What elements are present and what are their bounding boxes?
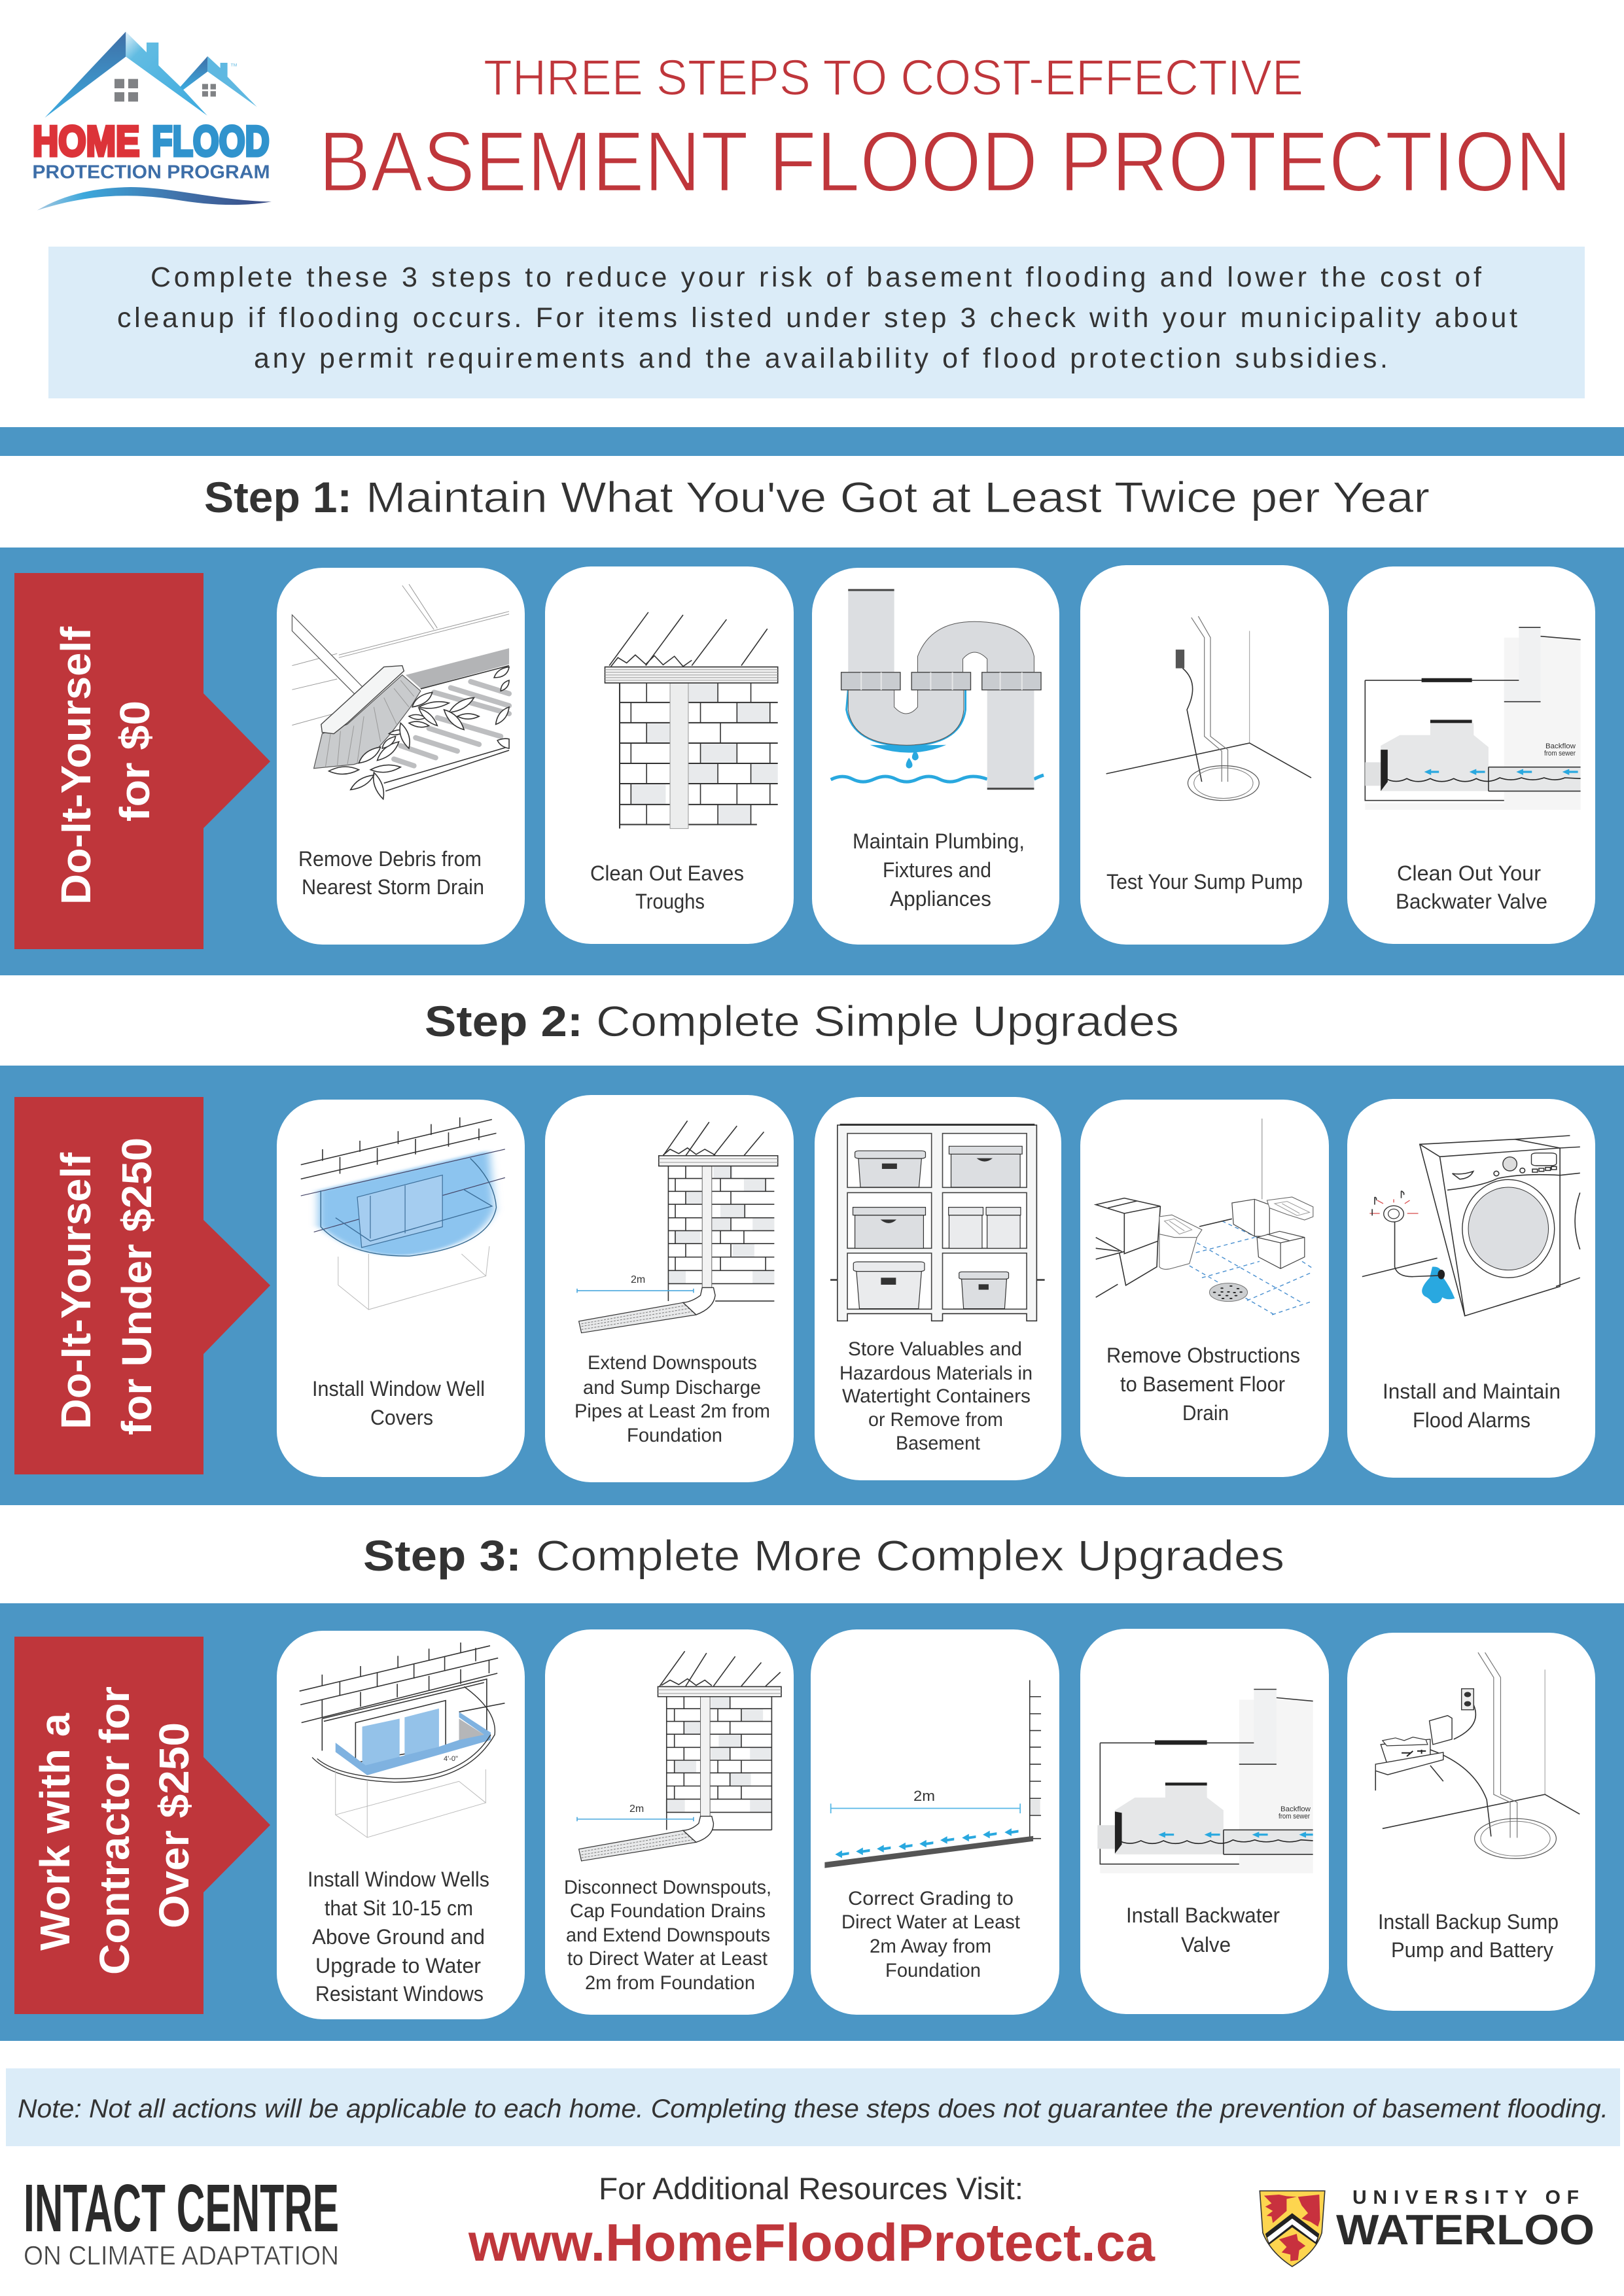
card: remove debris — [277, 568, 525, 945]
red tag: do-it-yourself for $0: Do-It-Yourself — [52, 626, 99, 905]
card: backup sump pump and battery — [1347, 1633, 1595, 2011]
card label — [1126, 1904, 1280, 1957]
icon: window well with water resistant window — [300, 1643, 504, 1837]
card: maintain plumbing — [812, 568, 1059, 945]
card: install backwater valve — [1080, 1629, 1329, 2014]
card: window well covers — [277, 1100, 525, 1477]
card label: Install Window Well — [312, 1377, 485, 1400]
red tag: work with a contractor for over $250: Contractor for — [91, 1686, 138, 1975]
red tag: work with a contractor for over $250: Work with a — [31, 1713, 79, 1951]
card label: Appliances — [890, 887, 991, 911]
dimension label: 2m: 2m — [631, 1274, 645, 1285]
card label: that Sit 10-15 cm — [325, 1896, 473, 1920]
card label: Store Valuables and — [848, 1338, 1022, 1360]
heading: step 3: Step 3: — [363, 1531, 521, 1580]
introduction text: any permit requirements and the availability of flood protection subsidies. — [254, 343, 1388, 374]
icon: backup sump pump and battery — [1375, 1652, 1580, 1858]
card label: to Basement Floor — [1120, 1372, 1285, 1396]
resources call to action: www.HomeFloodProtect.ca — [468, 2214, 1156, 2272]
card label — [1383, 1380, 1561, 1432]
icon: window well cover — [301, 1117, 505, 1310]
icon: washer with flood alarm — [1362, 1136, 1580, 1316]
card label — [574, 1352, 770, 1446]
card label: Above Ground and — [312, 1925, 485, 1949]
card label — [853, 829, 1025, 911]
card label: Nearest Storm Drain — [302, 875, 484, 899]
tiny label: backflow — [1544, 742, 1576, 757]
card label — [839, 1338, 1033, 1454]
heading: step 1: Maintain What You've Got at Least Twice per Year — [366, 473, 1430, 521]
card: correct grading — [811, 1629, 1059, 2015]
tiny label: backflow: Backflow — [1545, 742, 1576, 750]
card label: Clean Out Your — [1397, 861, 1541, 885]
card: install window wells — [277, 1631, 525, 2019]
logo: Intact Centre: INTACT CENTRE — [24, 2170, 339, 2246]
top blue band — [0, 427, 1624, 456]
card label — [298, 847, 484, 899]
tiny label: backflow — [1279, 1805, 1311, 1820]
card label: Backwater Valve — [1396, 890, 1547, 913]
card label: 2m from Foundation — [585, 1972, 755, 1994]
card label: Install Backup Sump — [1378, 1910, 1559, 1934]
card label: Clean Out Eaves — [590, 861, 744, 885]
tiny label: backflow: from sewer — [1279, 1813, 1310, 1820]
panel: step 3 — [0, 1603, 1624, 2041]
card label: or Remove from — [868, 1409, 1003, 1431]
card label: Valve — [1181, 1933, 1231, 1957]
heading: step 2: Complete Simple Upgrades — [596, 997, 1179, 1045]
resources call to action — [468, 2171, 1156, 2272]
card label: Fixtures and — [883, 858, 991, 882]
red tag: do-it-yourself for under $250 — [14, 1097, 270, 1474]
card label: Correct Grading to — [848, 1888, 1014, 1909]
introduction text — [117, 262, 1517, 374]
card label: Install Backwater — [1126, 1904, 1280, 1927]
red tag: work with a contractor for over $250: Over $250 — [150, 1722, 198, 1928]
resources call to action: For Additional Resources Visit: — [599, 2171, 1023, 2206]
university of: UNIVERSITY OF — [1352, 2187, 1579, 2208]
logo: Home Flood Protection Program — [32, 31, 272, 211]
title line 1: THREE STEPS TO COST-EFFECTIVE — [484, 50, 1303, 106]
heading: step 2: Step 2: — [425, 997, 583, 1045]
card label: Install Window Wells — [308, 1868, 489, 1891]
card label: Disconnect Downspouts, — [564, 1877, 771, 1898]
dimension label: 2m: 2m — [629, 1803, 644, 1815]
tiny label: backflow: Backflow — [1280, 1805, 1311, 1813]
card label: Install and Maintain — [1383, 1380, 1561, 1403]
panel: note — [6, 2068, 1620, 2146]
icon: small house roof — [180, 56, 257, 107]
icon: Waterloo shield — [1260, 2191, 1325, 2267]
icon: disconnected downspout — [577, 1651, 781, 1861]
card label: Foundation — [885, 1960, 981, 1981]
trademark: TM — [231, 63, 237, 68]
card label: Remove Debris from — [298, 847, 482, 871]
panel: step 2 — [0, 1066, 1624, 1505]
logo word: FLOOD: FLOOD — [152, 117, 270, 165]
logo: University of Waterloo — [1260, 2187, 1595, 2267]
note text: Note: Not all actions will be applicable to each home. Completing these steps does not guarantee the prevention of basement flooding. — [18, 2095, 1608, 2123]
card: clean eaves troughs — [545, 566, 794, 944]
card label: Covers — [370, 1406, 433, 1429]
heading: step 3: Complete More Complex Upgrades — [536, 1531, 1284, 1580]
card label: Pump and Battery — [1391, 1938, 1553, 1962]
card label — [1106, 1344, 1300, 1425]
card label — [1396, 861, 1547, 913]
red tag: do-it-yourself for under $250: for Under $250 — [113, 1138, 160, 1435]
card label: and Extend Downspouts — [566, 1924, 770, 1946]
icon: boxes around floor drain — [1096, 1119, 1313, 1315]
waterloo: WATERLOO — [1336, 2206, 1595, 2253]
icon: sump pump — [1106, 616, 1311, 801]
card label: to Direct Water at Least — [567, 1948, 768, 1970]
card: flood alarms — [1347, 1099, 1595, 1478]
card label: Test Your Sump Pump — [1106, 870, 1303, 894]
card label — [308, 1868, 489, 2006]
icon: broom sweeping leaves off a storm drain — [292, 584, 509, 799]
card label: Upgrade to Water — [315, 1954, 481, 1977]
card label: Basement — [896, 1433, 981, 1454]
logo: Intact Centre: ON CLIMATE ADAPTATION — [24, 2240, 339, 2270]
icon: gutter and brick wall — [605, 612, 778, 829]
card label: Remove Obstructions — [1106, 1344, 1300, 1367]
card label: Pipes at Least 2m from — [574, 1400, 770, 1422]
icon: backwater valve — [1097, 1690, 1313, 1873]
card: disconnect downspouts — [545, 1629, 794, 2015]
card label — [590, 861, 744, 913]
icon: sloped grade away from foundation — [824, 1680, 1041, 1868]
icon: leaking P-trap pipe — [831, 589, 1044, 790]
red tag: work with a contractor for over $250 — [14, 1637, 270, 2014]
card label — [564, 1877, 771, 1994]
card: test sump pump — [1080, 565, 1329, 945]
icon: water swoosh — [37, 187, 272, 211]
dimension label: 2m: 2m — [913, 1788, 935, 1804]
card label: Resistant Windows — [315, 1982, 484, 2006]
red tag: do-it-yourself for $0: for $0 — [111, 701, 158, 822]
card: clean backwater valve — [1347, 566, 1595, 944]
icon: house windows — [115, 79, 216, 101]
card label — [841, 1888, 1021, 1981]
card label — [1378, 1910, 1559, 1962]
card label: Direct Water at Least — [841, 1911, 1021, 1933]
card label: Cap Foundation Drains — [570, 1900, 766, 1922]
card label: and Sump Discharge — [583, 1377, 761, 1399]
panel: step 1 — [0, 548, 1624, 975]
red tag: do-it-yourself for $0 — [14, 573, 270, 949]
icon: downspout extension — [577, 1121, 778, 1333]
tiny label: backflow: from sewer — [1544, 750, 1576, 757]
logo word: HOME: HOME — [33, 117, 139, 165]
card label — [312, 1377, 485, 1429]
card label: Maintain Plumbing, — [853, 829, 1025, 853]
card label: Flood Alarms — [1413, 1408, 1530, 1432]
card label: Troughs — [635, 890, 705, 913]
dimension label: 4'-0" — [444, 1755, 458, 1763]
logo: Intact Centre — [24, 2170, 339, 2270]
card label: Foundation — [627, 1425, 722, 1446]
heading: step 1: Step 1: — [204, 473, 352, 521]
card label: Extend Downspouts — [588, 1352, 757, 1374]
card label: Watertight Containers — [842, 1385, 1031, 1407]
card label: 2m Away from — [870, 1936, 991, 1957]
card: store valuables — [815, 1097, 1061, 1480]
icon: large house roof — [44, 31, 207, 118]
heading: step 2 — [425, 997, 1179, 1045]
card label: Drain — [1182, 1401, 1229, 1425]
red tag: do-it-yourself for under $250: Do-It-Yourself — [52, 1152, 99, 1429]
introduction text: cleanup if flooding occurs. For items listed under step 3 check with your municipality about — [117, 302, 1517, 334]
card: remove obstructions — [1080, 1100, 1329, 1477]
icon: shelf with containers — [830, 1124, 1045, 1321]
panel: introduction — [48, 247, 1585, 398]
icon: backwater valve — [1365, 627, 1581, 810]
card: extend downspouts — [545, 1095, 794, 1482]
title — [319, 50, 1572, 209]
card label: Hazardous Materials in — [839, 1363, 1033, 1384]
logo word: PROTECTION PROGRAM: PROTECTION PROGRAM — [32, 162, 270, 183]
introduction text: Complete these 3 steps to reduce your risk of basement flooding and lower the cost of — [150, 262, 1482, 293]
